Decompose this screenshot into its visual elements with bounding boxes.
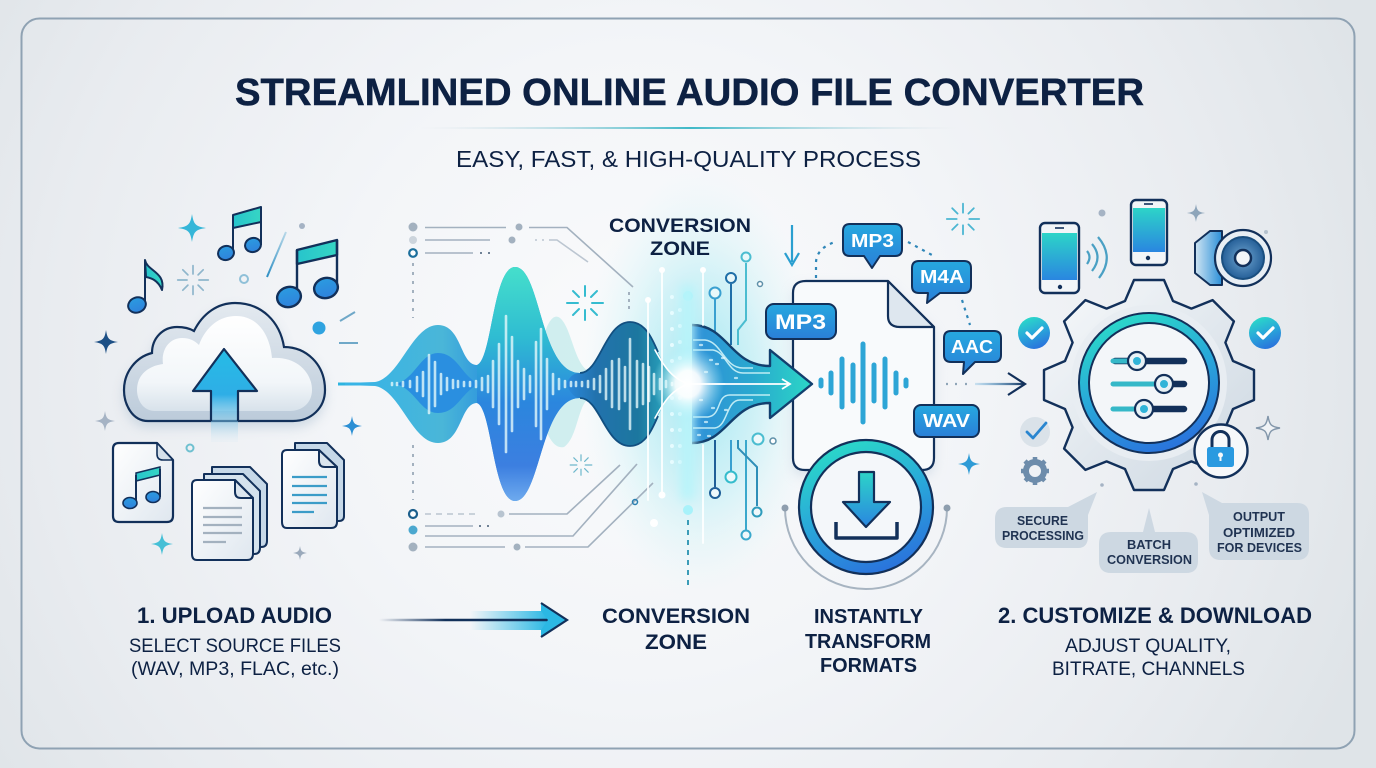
text: customize and download step: BITRATE, CHANNELS (1052, 658, 1245, 680)
icon: check badges (1018, 317, 1281, 447)
subtitle: EASY, FAST, & HIGH-QUALITY PROCESS (456, 146, 921, 172)
central lobe (477, 267, 580, 501)
waveform bars (392, 316, 672, 452)
badge: MP3 left (766, 304, 836, 339)
text: upload audio step: 1. UPLOAD AUDIO (137, 603, 332, 628)
document (793, 281, 934, 476)
badge: M4A (912, 261, 971, 303)
callout: output optimized: FOR DEVICES (1217, 540, 1302, 555)
conversion zone glow (580, 169, 820, 599)
text: instantly transform formats (805, 606, 931, 677)
badge: AAC (944, 331, 1001, 374)
icon: small down arrow (785, 225, 799, 265)
icon: lock badge (1194, 424, 1248, 478)
icon: audio file (113, 443, 173, 522)
text: instantly transform formats: FORMATS (820, 655, 917, 677)
arrow: upload to conversion (379, 603, 567, 637)
text: conversion zone step (602, 605, 750, 654)
badge: MP3 left: MP3 (775, 311, 826, 334)
panel: upload illustration (94, 207, 362, 560)
dotted connectors (816, 242, 970, 325)
icon: speaker (1195, 230, 1271, 286)
callout: batch conversion: CONVERSION (1107, 552, 1192, 567)
settings sliders (1113, 352, 1184, 418)
icon: cloud with upload arrow (124, 303, 325, 442)
badge: MP3 top (843, 224, 902, 268)
document sound bars (821, 344, 906, 422)
text: upload audio step: SELECT SOURCE FILES (129, 635, 341, 657)
text: upload audio step (129, 603, 341, 680)
wave body (345, 267, 686, 501)
icon: phone with sound waves (1040, 223, 1107, 293)
icon: stack of document files (282, 443, 344, 528)
decorative marks (1098, 204, 1280, 440)
text: customize and download step (998, 603, 1312, 680)
text: conversion zone step: CONVERSION (602, 605, 750, 628)
callout: output optimized: OUTPUT (1233, 509, 1285, 524)
chart: circuit traces right of the zone (688, 252, 776, 587)
callout: secure processing: SECURE (1017, 513, 1068, 528)
callout: output optimized: OPTIMIZED (1223, 525, 1295, 540)
conversion zone label: ZONE (650, 238, 710, 260)
badge: MP3 top: MP3 (851, 231, 894, 251)
callout: secure processing (995, 483, 1104, 548)
first lobe inner (395, 353, 480, 413)
arrow: to customize step (946, 373, 1025, 395)
icon: sparkles around the cloud (94, 214, 362, 560)
icon: phone (1131, 200, 1167, 265)
text: customize and download step: 2. CUSTOMIZE & DOWNLOAD (998, 603, 1312, 628)
badge: M4A: M4A (920, 267, 964, 287)
text: instantly transform formats: TRANSFORM (805, 631, 931, 653)
callout: secure processing: PROCESSING (1002, 528, 1084, 543)
chart: circuit traces left of the zone (408, 222, 653, 552)
icon: large double note (275, 240, 340, 310)
callout: output optimized (1194, 482, 1309, 560)
pale echo lobes (535, 317, 620, 447)
text: customize and download step: ADJUST QUALITY, (1065, 635, 1231, 657)
conversion zone label (609, 215, 751, 260)
icon: conversion arrow (690, 325, 812, 443)
sparkles (947, 204, 980, 475)
badge: AAC: AAC (951, 337, 993, 357)
panel: customize and devices (995, 200, 1309, 573)
title: STREAMLINED ONLINE AUDIO FILE CONVERTER (235, 72, 1144, 114)
icon: stack of text files (192, 467, 267, 560)
callout: batch conversion: BATCH (1127, 537, 1171, 552)
panel: format conversion (766, 204, 1025, 589)
icon: gear (1044, 280, 1254, 490)
icon: download button (782, 440, 950, 589)
text: conversion zone step: ZONE (645, 631, 707, 654)
badge: WAV (914, 405, 979, 437)
badge: WAV: WAV (923, 411, 970, 431)
chart: audio waveform (338, 267, 686, 501)
conversion flare and particles (645, 267, 725, 543)
icon: single music note (126, 260, 163, 315)
callout: batch conversion (1099, 508, 1198, 573)
text: upload audio step: (WAV, MP3, FLAC, etc.) (131, 658, 339, 680)
icon: top double note (216, 207, 263, 262)
icon: small gear (1021, 457, 1049, 485)
conversion zone label: CONVERSION (609, 215, 751, 237)
text: instantly transform formats: INSTANTLY (814, 606, 924, 628)
last lobe (566, 322, 686, 446)
